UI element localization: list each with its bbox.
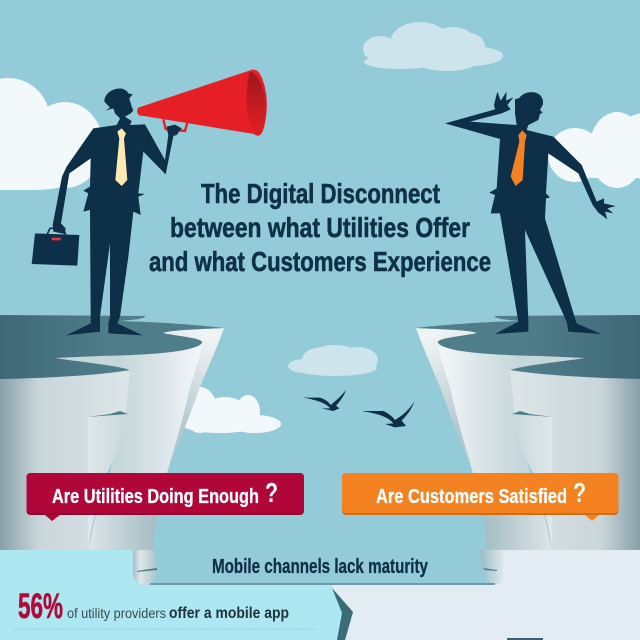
briefcase: [32, 228, 79, 266]
callout: customers: [342, 473, 618, 521]
callout: utilities: ?: [265, 477, 278, 508]
title: The Digital Disconnect: [201, 178, 440, 209]
cloud: lower left: [183, 387, 281, 433]
cliff pillar: [88, 414, 128, 550]
left cliff: [0, 315, 224, 550]
stat: 56 percent: of utility providers: [67, 605, 166, 621]
cliff back strip: [416, 328, 510, 550]
cliff front face: [510, 370, 640, 550]
cliff lower face: [473, 473, 552, 550]
stat: 56 percent: 56%: [18, 587, 63, 626]
scroll curl: right: [480, 550, 505, 585]
pillar ledge: [512, 411, 552, 417]
cliff lower face: [88, 473, 167, 550]
cliff pillar: [512, 414, 552, 550]
callout: customers: ?: [573, 477, 586, 508]
callout: utilities: Are Utilities Doing Enough: [52, 486, 259, 508]
title: and what Customers Experience: [149, 246, 491, 277]
silhouette body: [445, 92, 616, 334]
bird 1: [303, 389, 346, 411]
cloud: upper left: [0, 78, 103, 190]
plateau: [416, 315, 640, 379]
title: [149, 178, 491, 277]
panel: left cyan: [0, 550, 342, 640]
megaphone: [137, 70, 267, 136]
stat: 56 percent: offer a mobile app: [169, 605, 289, 622]
tie: [115, 128, 127, 186]
right cliff: [416, 315, 640, 550]
bird 2: [362, 401, 414, 427]
plateau: [0, 315, 224, 379]
silhouette body: [53, 95, 182, 335]
sky bottom shadow: [150, 583, 495, 585]
stat: 56 percent: [18, 587, 289, 626]
cliff middle face: [55, 342, 204, 473]
pillar ledge: [88, 411, 128, 417]
scroll curl: left: [133, 550, 157, 585]
panel: right pale: [332, 550, 640, 640]
cliff back strip: [130, 328, 224, 550]
cliff front face: [0, 370, 130, 550]
birds: [303, 389, 414, 427]
man with megaphone: [32, 70, 267, 335]
heading: mobile channels: Mobile channels lack maturity: [212, 556, 429, 578]
man listening: [445, 92, 616, 334]
cliff middle face: [436, 342, 585, 473]
hat: [104, 89, 133, 111]
callout: customers: Are Customers Satisfied: [376, 486, 567, 508]
cloud: upper right: [548, 112, 640, 188]
callout: utilities: [26, 473, 304, 521]
bottom dark mark: [507, 638, 543, 640]
tie: [511, 130, 527, 186]
cloud: middle: [288, 345, 378, 376]
chevron arrow: [332, 588, 353, 640]
title: between what Utilities Offer: [170, 212, 470, 243]
cloud: top centre: [363, 22, 503, 71]
